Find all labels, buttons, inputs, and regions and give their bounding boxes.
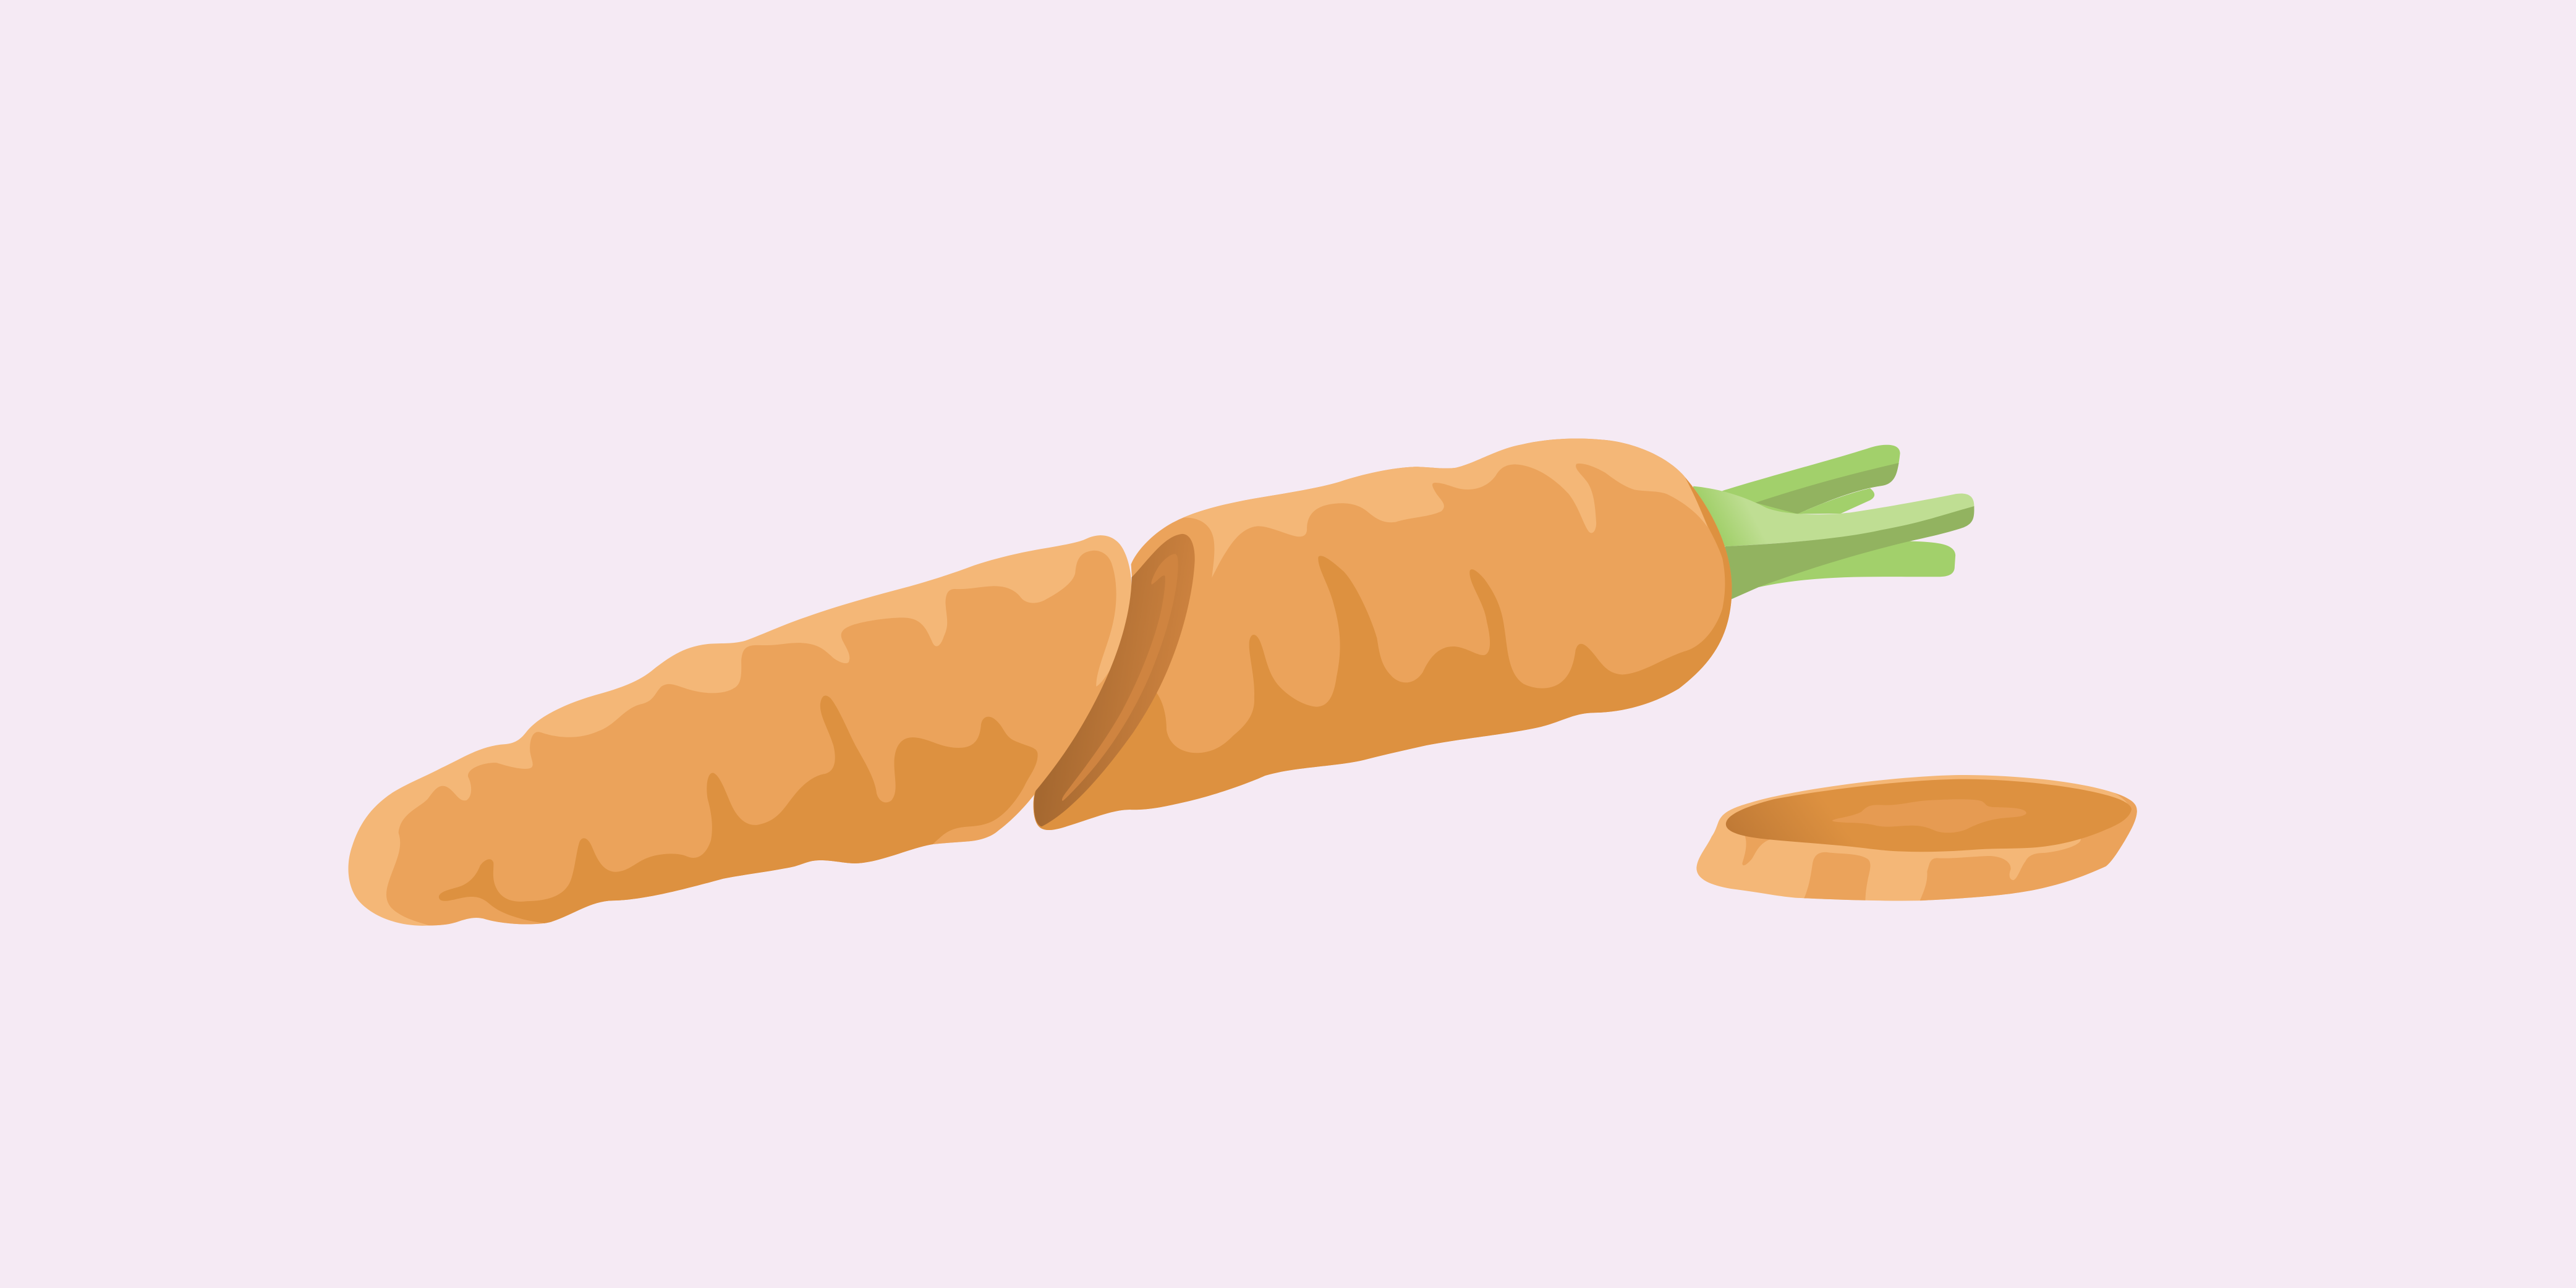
slice top face — [1726, 779, 2132, 852]
front light leaf — [1690, 486, 1974, 546]
left piece silhouette — [348, 535, 1132, 926]
left piece shadow — [439, 695, 1038, 938]
slice core blob — [1832, 799, 2026, 833]
slice right mid tone — [1920, 791, 2142, 907]
cut face outer — [1034, 534, 1195, 826]
right piece silhouette — [1034, 438, 1732, 830]
right piece highlight — [1184, 439, 1707, 577]
carrot leaves — [1690, 445, 1974, 599]
carrot left piece — [348, 535, 1159, 938]
cut face inner core — [1062, 554, 1178, 801]
back top leaf shadow band — [1755, 463, 1899, 514]
small leaf tip — [1798, 488, 1874, 514]
slice side — [1696, 775, 2137, 900]
cut face — [1034, 534, 1195, 826]
carrot right piece — [1034, 439, 1732, 830]
right piece shadow — [1034, 477, 1732, 830]
front leaf shadow band — [1690, 506, 1974, 599]
back top leaf — [1690, 445, 1900, 530]
left piece mid tone — [386, 551, 1159, 938]
carrot slice — [1696, 775, 2142, 907]
illustration: cut carrot with slice — [348, 439, 2137, 926]
lower leaf — [1759, 541, 1955, 587]
slice centre mid tone — [1804, 852, 1870, 904]
slice small drip — [1742, 836, 1769, 865]
